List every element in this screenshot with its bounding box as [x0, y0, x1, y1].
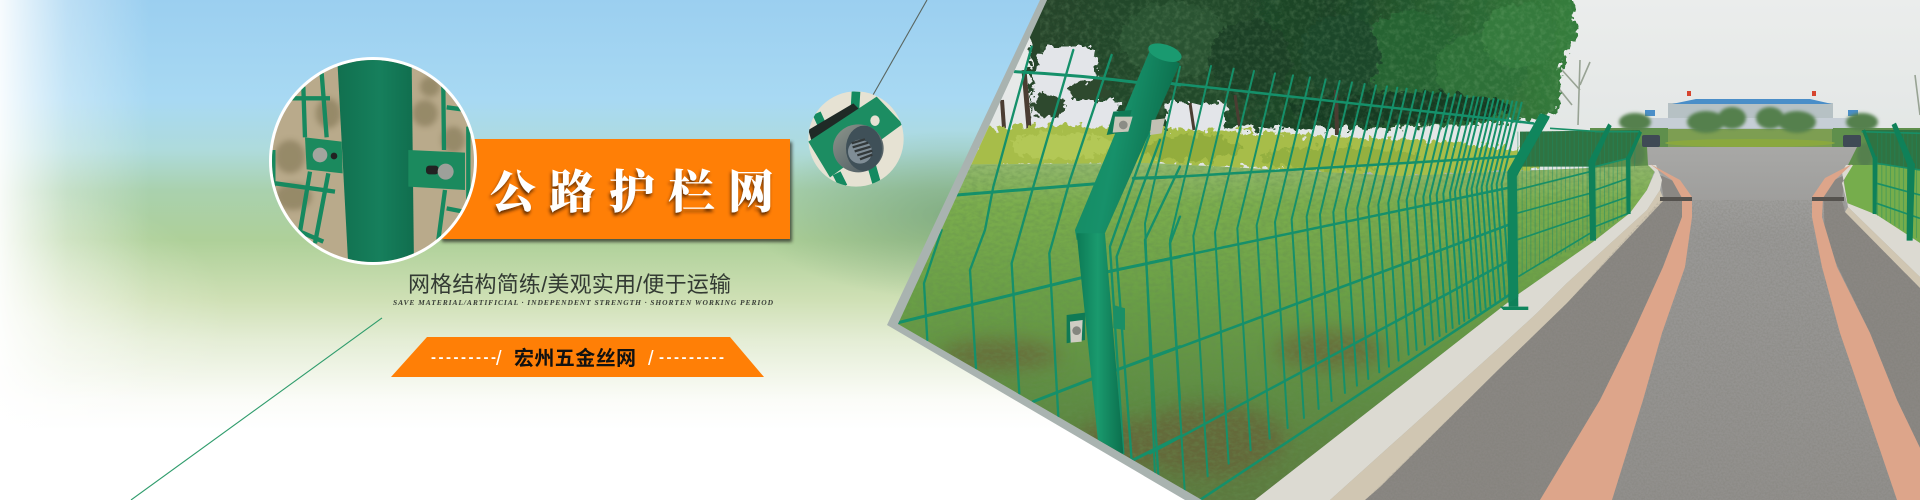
post brackets	[1067, 110, 1165, 343]
distant building and lawn	[1590, 91, 1920, 170]
soil patches	[940, 330, 1385, 476]
thin green diagonal line	[131, 318, 382, 500]
grass texture	[924, 165, 1655, 480]
fence and road photo	[880, 0, 1920, 500]
thin dark line to detail circle	[873, 0, 927, 95]
title: 公路护栏网	[490, 156, 774, 222]
circle post	[337, 60, 414, 267]
right pink band	[1812, 164, 1920, 500]
tag left dashes: ---------	[431, 349, 496, 366]
road surface	[1542, 147, 1919, 500]
road shoulders	[1365, 175, 1920, 500]
tag company name: 宏州五金丝网	[514, 346, 636, 370]
fence verticals right of post	[1145, 66, 1522, 490]
bare tree	[1556, 60, 1920, 125]
orange title banner	[440, 139, 792, 242]
left kerb	[1255, 165, 1664, 500]
company tag	[391, 337, 764, 377]
tag right dashes: ---------	[659, 349, 724, 366]
main post	[1067, 40, 1184, 460]
fence wires horizontal right of post	[1150, 83, 1533, 500]
next fence post	[1500, 113, 1549, 310]
sky gaps	[1030, 47, 1227, 130]
english tagline: SAVE MATERIAL/ARTIFICIAL · INDEPENDENT STRENGTH · SHORTEN WORKING PERIOD	[393, 298, 774, 307]
tag right slash: /	[648, 348, 654, 370]
detail circle: post and bracket	[267, 57, 480, 267]
sky	[880, 0, 1920, 170]
road texture	[1365, 200, 1920, 500]
grass	[880, 163, 1660, 500]
detail circle: bolt	[808, 91, 904, 187]
hedge	[970, 125, 1540, 178]
circle fence wires	[273, 73, 468, 243]
circle brackets	[305, 137, 343, 173]
subtitle: 网格结构简练/美观实用/便于运输	[408, 272, 731, 297]
fence near post wires	[898, 47, 1180, 477]
road drains	[1660, 197, 1844, 201]
left pink band	[1540, 164, 1692, 500]
photo grey border	[887, 0, 1920, 500]
main fence wires	[898, 47, 1533, 500]
tag left slash: /	[496, 348, 502, 370]
far fence sections	[1507, 113, 1920, 307]
cars	[1642, 135, 1861, 147]
right kerb	[1842, 165, 1920, 288]
tree trunks	[1002, 70, 1337, 135]
trees	[1030, 0, 1580, 130]
